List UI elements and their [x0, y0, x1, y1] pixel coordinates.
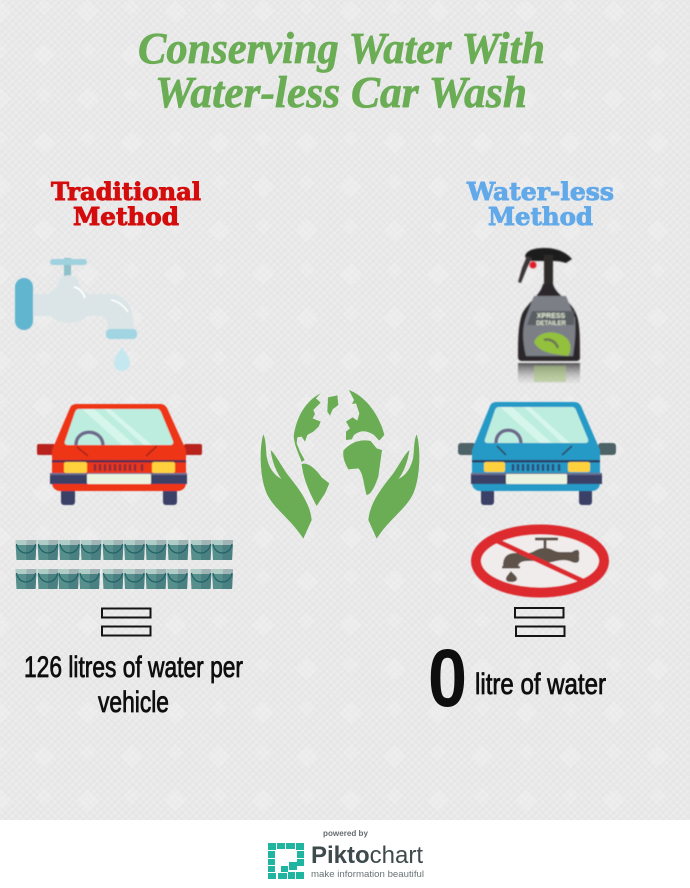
icon: equals sign right	[515, 608, 564, 636]
heading: water-less method: Water-less	[466, 177, 614, 206]
text: 0 litre of water: 0	[428, 633, 467, 724]
icon: spray bottle: XPRESS	[537, 313, 566, 320]
icon: dripping faucet	[15, 258, 137, 371]
icon: globe held by hands	[261, 390, 419, 539]
text: 0 litre of water: litre of water	[475, 668, 606, 701]
icon: no water sign	[476, 530, 604, 592]
title	[138, 24, 545, 117]
text: 126 litres of water per vehicle: 126 litres of water per	[24, 651, 243, 684]
heading: water-less method	[466, 177, 614, 231]
title: Conserving Water With	[138, 24, 545, 73]
tagline: make information beautiful	[311, 869, 424, 880]
text: 126 litres of water per vehicle	[24, 651, 243, 719]
powered by label: powered by	[323, 828, 368, 838]
text: 126 litres of water per vehicle: vehicle	[98, 686, 169, 719]
heading: water-less method: Method	[488, 202, 593, 231]
text: 0 litre of water	[428, 633, 606, 724]
icon: spray bottle	[518, 248, 580, 383]
Piktochart wordmark: Piktochart	[311, 842, 423, 869]
footer: powered by Piktochart	[268, 828, 424, 880]
title: Water-less Car Wash	[155, 68, 527, 117]
icon: row of water buckets	[16, 540, 233, 589]
icon: Piktochart logo	[268, 843, 304, 879]
icon: red car	[37, 404, 202, 505]
heading: traditional method: Method	[73, 202, 179, 231]
heading: traditional method: Traditional	[51, 177, 201, 206]
heading: traditional method	[51, 177, 201, 231]
icon: blue car	[458, 402, 616, 505]
icon: equals sign left	[102, 608, 150, 636]
icon: spray bottle: DETAILER	[536, 321, 566, 327]
